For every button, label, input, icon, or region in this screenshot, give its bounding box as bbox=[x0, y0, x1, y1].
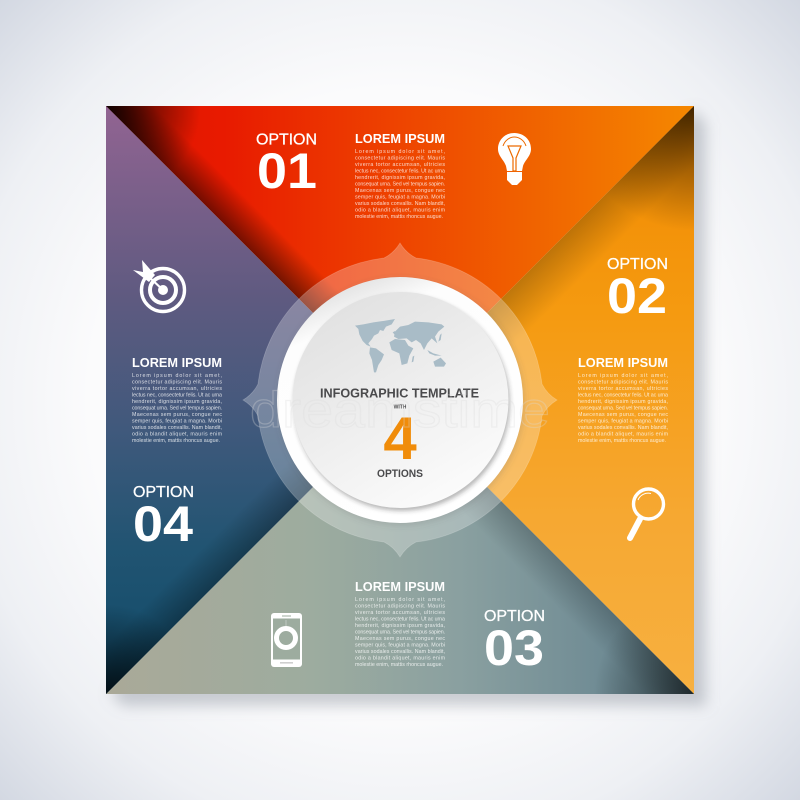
panel: option 1 red triangle bbox=[106, 106, 694, 400]
text block: option 2: semper quis, feugiat a magna. Morbi bbox=[578, 418, 668, 424]
text block: option 4: consectetur adipiscing elit. Mauris bbox=[132, 380, 222, 386]
text block: option 4: Maecenas sem purus, congue nec bbox=[132, 412, 222, 418]
text block: option 4: consequat urna. Sed vel tempus sapien. bbox=[132, 406, 222, 412]
text block: option 3: varius sodales convallis. Nam blandit, bbox=[355, 649, 445, 655]
text block: option 1: Lorem ipsum dolor sit amet, bbox=[355, 149, 445, 155]
panel: option 4 purple-blue triangle bbox=[106, 106, 400, 694]
option 2 label: 02 bbox=[607, 268, 667, 324]
text block: option 4: viverra tortor accumsan, ultricies bbox=[132, 386, 222, 392]
square drop shadow bbox=[110, 110, 706, 706]
text block: option 1: viverra tortor accumsan, ultricies bbox=[355, 162, 445, 168]
text block: option 3: consectetur adipiscing elit. Mauris bbox=[355, 604, 445, 610]
text block: option 2: LOREM IPSUM bbox=[578, 355, 668, 370]
centre title: INFOGRAPHIC TEMPLATE bbox=[320, 386, 479, 400]
text block: option 1: hendrerit, dignissim ipsum gravida, bbox=[355, 175, 445, 181]
option 1 label: OPTION bbox=[256, 132, 317, 148]
text block: option 3: molestie enim, mattis rhoncus augue. bbox=[355, 662, 443, 668]
text block: option 4: varius sodales convallis. Nam blandit, bbox=[132, 425, 222, 431]
option 2 label: OPTION bbox=[607, 256, 668, 273]
text block: option 2: odio a blandit aliquet, mauris enim bbox=[578, 432, 669, 438]
text block: option 4: lectus nec, consectetur felis. Ut ac urna bbox=[132, 392, 222, 398]
text block: option 1: consequat urna. Sed vel tempus sapien. bbox=[355, 182, 445, 188]
text block: option 1: lectus nec, consectetur felis. Ut ac urna bbox=[355, 168, 445, 174]
text block: option 3: semper quis, feugiat a magna. Morbi bbox=[355, 642, 445, 648]
option 1 label: 01 bbox=[257, 143, 317, 199]
text block: option 2: viverra tortor accumsan, ultricies bbox=[578, 386, 668, 392]
option 3 label: OPTION bbox=[484, 608, 545, 625]
text block: option 3: lectus nec, consectetur felis. Ut ac urna bbox=[355, 616, 445, 622]
option 4 label: OPTION bbox=[133, 484, 194, 501]
text block: option 2: hendrerit, dignissim ipsum gravida, bbox=[578, 399, 668, 405]
option 3 label: 03 bbox=[484, 620, 544, 676]
text block: option 3 bbox=[355, 579, 446, 668]
centre title: WITH bbox=[394, 404, 407, 410]
text block: option 2: molestie enim, mattis rhoncus augue. bbox=[578, 438, 666, 444]
text block: option 2: consectetur adipiscing elit. Mauris bbox=[578, 380, 668, 386]
text block: option 3: LOREM IPSUM bbox=[355, 579, 445, 594]
watermark: dreamstime bbox=[250, 382, 550, 438]
text block: option 1: varius sodales convallis. Nam blandit, bbox=[355, 201, 445, 207]
text block: option 2 bbox=[578, 355, 669, 444]
text block: option 1: molestie enim, mattis rhoncus augue. bbox=[355, 214, 443, 220]
centre title: 4 bbox=[383, 405, 417, 472]
text block: option 3: hendrerit, dignissim ipsum gravida, bbox=[355, 623, 445, 629]
text block: option 3: Maecenas sem purus, congue nec bbox=[355, 636, 445, 642]
icon: light bulb bbox=[498, 133, 531, 185]
icon: target with arrow bbox=[133, 260, 184, 312]
text block: option 4: Lorem ipsum dolor sit amet, bbox=[132, 373, 222, 379]
centre title: OPTIONS bbox=[377, 468, 423, 480]
text block: option 4: semper quis, feugiat a magna. Morbi bbox=[132, 418, 222, 424]
text block: option 1: Maecenas sem purus, congue nec bbox=[355, 188, 445, 194]
text block: option 2: Lorem ipsum dolor sit amet, bbox=[578, 373, 668, 379]
world map bbox=[355, 319, 446, 372]
text block: option 1: odio a blandit aliquet, mauris enim bbox=[355, 208, 446, 214]
text block: option 4 bbox=[132, 355, 223, 444]
panel: option 2 orange triangle bbox=[400, 106, 694, 694]
text block: option 1: semper quis, feugiat a magna. Morbi bbox=[355, 194, 445, 200]
translucent ring with four tips bbox=[243, 243, 557, 557]
text block: option 1: consectetur adipiscing elit. Mauris bbox=[355, 156, 445, 162]
text block: option 1: LOREM IPSUM bbox=[355, 131, 445, 146]
centre paper circle bbox=[277, 277, 525, 526]
panel: option 3 grey-green triangle bbox=[106, 400, 694, 694]
text block: option 4: odio a blandit aliquet, mauris enim bbox=[132, 432, 223, 438]
text block: option 2: varius sodales convallis. Nam blandit, bbox=[578, 425, 668, 431]
text block: option 2: consequat urna. Sed vel tempus sapien. bbox=[578, 406, 668, 412]
text block: option 4: molestie enim, mattis rhoncus augue. bbox=[132, 438, 220, 444]
text block: option 2: lectus nec, consectetur felis. Ut ac urna bbox=[578, 392, 668, 398]
text block: option 3: Lorem ipsum dolor sit amet, bbox=[355, 597, 445, 603]
icon: smartphone with donut bbox=[271, 613, 302, 667]
text block: option 3: consequat urna. Sed vel tempus sapien. bbox=[355, 630, 445, 636]
text block: option 1 bbox=[355, 131, 446, 220]
text block: option 3: viverra tortor accumsan, ultricies bbox=[355, 610, 445, 616]
text block: option 3: odio a blandit aliquet, mauris enim bbox=[355, 656, 446, 662]
option 4 label: 04 bbox=[133, 496, 193, 552]
text block: option 4: LOREM IPSUM bbox=[132, 355, 222, 370]
text block: option 4: hendrerit, dignissim ipsum gravida, bbox=[132, 399, 222, 405]
centre title bbox=[320, 386, 479, 480]
icon: magnifying glass bbox=[630, 489, 664, 538]
text block: option 2: Maecenas sem purus, congue nec bbox=[578, 412, 668, 418]
